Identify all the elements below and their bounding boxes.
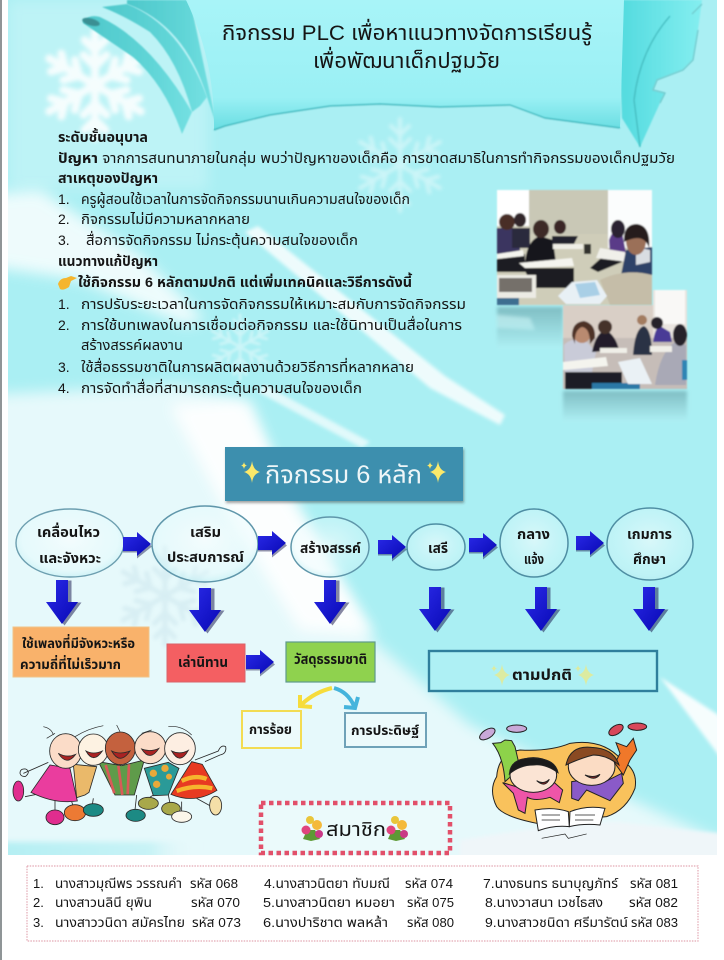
box: crafting: การประดิษฐ์ <box>351 723 419 738</box>
circle: enrichment experience <box>152 506 258 582</box>
desks and dark under-desk <box>497 254 525 272</box>
down arrows <box>46 580 668 634</box>
member row three: 9.นางสาวชนิดา ศรีมารัตน์ <box>485 915 628 930</box>
orange blob <box>492 742 636 823</box>
center person <box>525 236 556 263</box>
shoes <box>13 781 24 801</box>
girl body <box>503 782 563 813</box>
member row two: 5.นางสาวนิตยา หมอยา <box>263 895 395 910</box>
icon: bouquet right <box>386 816 408 841</box>
member row three: รหัส 080 <box>407 915 454 930</box>
heads <box>50 734 82 768</box>
heading: six activities <box>225 447 463 501</box>
sparkle <box>491 664 510 686</box>
member row three <box>33 915 678 930</box>
causes list: สื่อการจัดกิจกรรม ไม่กระตุ้นความสนใจของเด็ก <box>86 230 358 249</box>
title: เพื่อพัฒนาเด็กปฐมวัย <box>313 46 500 73</box>
bag <box>558 280 607 304</box>
smiles <box>58 748 188 760</box>
member row three: 3. <box>33 915 44 930</box>
member row two: 8.นางวาสนา เวชไธสง <box>485 895 603 910</box>
arrow: blue to crafts <box>334 688 358 708</box>
boy leg <box>615 738 637 775</box>
arrow <box>378 535 407 562</box>
circle: educational games <box>607 508 693 580</box>
girl leg <box>493 740 520 782</box>
causes list: 1. <box>58 191 70 207</box>
member row one <box>33 876 678 891</box>
member row one: รหัส 081 <box>630 876 678 891</box>
left middle fold <box>102 4 207 112</box>
box: stringing: การร้อย <box>249 722 292 737</box>
member row one: รหัส 074 <box>405 876 453 891</box>
photo: teachers group one <box>497 190 652 305</box>
foreground woman <box>620 247 652 280</box>
box: music with rhythm: ความถี่ที่ไม่เร็วมาก <box>20 655 121 672</box>
solution lead: ใช้กิจกรรม 6 หลักตามปกติ แต่เพิ่มเทคนิคและวิธีการดังนี้ <box>78 272 413 290</box>
limbs <box>20 746 226 812</box>
scroll body <box>186 0 624 130</box>
causes list: 3. <box>58 232 70 248</box>
person in white <box>564 340 596 378</box>
member row three: นางสาววนิดา สมัครไทย <box>55 915 185 930</box>
ribbon banner <box>81 0 702 147</box>
causes list: 2. <box>58 211 70 227</box>
smiles <box>537 774 600 784</box>
solutions list: การใช้บทเพลงในการเชื่อมต่อกิจกรรม และใช้นิทานเป็นสื่อในการ <box>81 315 462 333</box>
boy body <box>572 773 623 801</box>
solutions list: ใช้สื่อธรรมชาติในการผลิตผลงานด้วยวิธีการที่หลากหลาย <box>81 357 414 375</box>
members title: สมาชิก <box>326 819 386 841</box>
box: natural materials <box>286 642 375 682</box>
arrow <box>258 531 287 558</box>
circle: creativity <box>291 517 369 577</box>
illustration: five children hugging <box>13 725 226 825</box>
members list panel <box>27 866 698 941</box>
box: storytelling: เล่านิทาน <box>178 654 228 670</box>
solutions list <box>58 296 466 397</box>
box: storytelling <box>167 644 245 682</box>
circle: enrichment experience: ประสบการณ์ <box>167 549 244 565</box>
arrow: yellow to stringing <box>300 688 332 707</box>
arrow <box>123 532 152 558</box>
problem statement: ปัญหา จากการสนทนาภายในกลุ่ม พบว่าปัญหาของเด็กคือ การขาดสมาธิในการทำกิจกรรมของเด็กปฐมวัย <box>58 150 675 167</box>
boy shoes <box>607 722 625 738</box>
members heading <box>261 803 450 853</box>
member row one: รหัส 068 <box>190 876 238 891</box>
level heading: ระดับชั้นอนุบาล <box>58 128 148 146</box>
circle: educational games: เกมการ <box>627 526 672 542</box>
circle: movement and rhythm: เคลื่อนไหว <box>37 522 100 540</box>
member row two: รหัส 082 <box>629 895 678 910</box>
causes heading: สาเหตุของปัญหา <box>58 170 158 187</box>
snowflakes decoration <box>43 32 445 644</box>
member row two: รหัส 075 <box>407 895 454 910</box>
girl head <box>510 758 557 792</box>
desks <box>563 357 608 370</box>
title: กิจกรรม PLC เพื่อหาแนวทางจัดการเรียนรู้ <box>222 18 592 46</box>
solutions list: การจัดทำสื่อที่สามารถกระตุ้นความสนใจของเด็ก <box>81 378 362 397</box>
circle: movement and rhythm <box>16 509 124 577</box>
title <box>222 18 592 73</box>
member row one: 7.นางธนทร ธนาบุญภัทร์ <box>483 876 619 891</box>
causes list: ครูผู้สอนใช้เวลาในการจัดกิจกรรมนานเกินความสนใจของเด็ก <box>81 191 410 208</box>
arrow <box>576 531 605 558</box>
member row two: 2. <box>33 895 44 910</box>
member row one: 4.นางสาวนิตยา ทับมณี <box>264 876 390 891</box>
open book <box>535 809 569 831</box>
solutions list: 1. <box>58 296 70 312</box>
box: natural materials: วัสดุธรรมชาติ <box>294 651 367 668</box>
sparkle <box>575 664 594 686</box>
solutions heading: แนวทางแก้ปัญหา <box>58 253 158 269</box>
circle: free play <box>407 524 465 570</box>
dresses <box>31 765 77 802</box>
photo two reflection <box>563 391 687 422</box>
box: as usual: ตามปกติ <box>512 667 572 684</box>
photo: teachers group two <box>563 290 687 389</box>
box: crafting <box>345 713 426 747</box>
girl shoes <box>478 726 497 742</box>
member row one: 1. <box>33 876 44 891</box>
problem and solution text block <box>58 128 675 397</box>
circle: outdoor: แจ้ง <box>524 551 544 567</box>
right fold edge <box>653 4 702 103</box>
icon: bouquet left <box>302 816 323 841</box>
box: music with rhythm: ใช้เพลงที่มีจังหวะหรือ <box>22 634 135 651</box>
boy head <box>568 748 615 785</box>
solutions list: 2. <box>58 317 70 333</box>
sparkle right <box>427 461 446 483</box>
desk with pile <box>497 275 536 298</box>
left inner fold <box>127 0 217 127</box>
circle: movement and rhythm: และจังหวะ <box>39 550 101 566</box>
solutions list: สร้างสรรค์ผลงาน <box>81 337 183 353</box>
member row three: รหัส 073 <box>192 915 241 930</box>
circle: free play: เสรี <box>428 540 448 556</box>
solutions list: การปรับระยะเวลาในการจัดกิจกรรมให้เหมาะสมกับการจัดกิจกรรม <box>81 296 466 312</box>
right fold crease <box>634 16 670 147</box>
sparkle left <box>241 461 260 483</box>
member row three: 6.นางปาริชาต พลหล้า <box>263 915 388 930</box>
woman in purple <box>609 230 627 258</box>
box: music with rhythm <box>13 627 149 677</box>
member row two: รหัส 070 <box>191 895 240 910</box>
circle: educational games: ศึกษา <box>633 551 666 567</box>
box: as usual <box>429 651 657 691</box>
right fold <box>618 0 702 147</box>
circle: outdoor: กลาง <box>517 526 550 542</box>
circle: outdoor <box>500 509 568 577</box>
left outer fold <box>83 16 192 134</box>
circle: enrichment experience: เสริม <box>190 524 221 540</box>
photo one reflection <box>497 307 563 349</box>
box: stringing <box>242 711 301 748</box>
illustration: children reading <box>478 722 647 838</box>
person in dark <box>592 330 619 352</box>
hair scribbles <box>43 725 192 738</box>
icon: pointing hand <box>58 276 77 290</box>
left dark fold tip <box>81 16 101 28</box>
heading text: กิจกรรม 6 หลัก <box>265 461 422 489</box>
solutions list: 3. <box>58 359 70 375</box>
arrow: story to materials <box>246 650 275 676</box>
causes list <box>58 191 410 249</box>
member row two: นางสาวนลินี ยุพิน <box>55 895 152 910</box>
far row people <box>497 228 520 254</box>
member row three: รหัส 083 <box>631 915 678 930</box>
flow of six activities <box>16 506 693 582</box>
circle: creativity: สร้างสรรค์ <box>300 540 361 556</box>
causes list: กิจกรรมไม่มีความหลากหลาย <box>81 211 250 227</box>
member row one: นางสาวมุณีพร วรรณคำ <box>55 876 182 891</box>
member row two <box>33 895 678 910</box>
arrow <box>469 533 498 560</box>
solutions list: 4. <box>58 380 70 396</box>
